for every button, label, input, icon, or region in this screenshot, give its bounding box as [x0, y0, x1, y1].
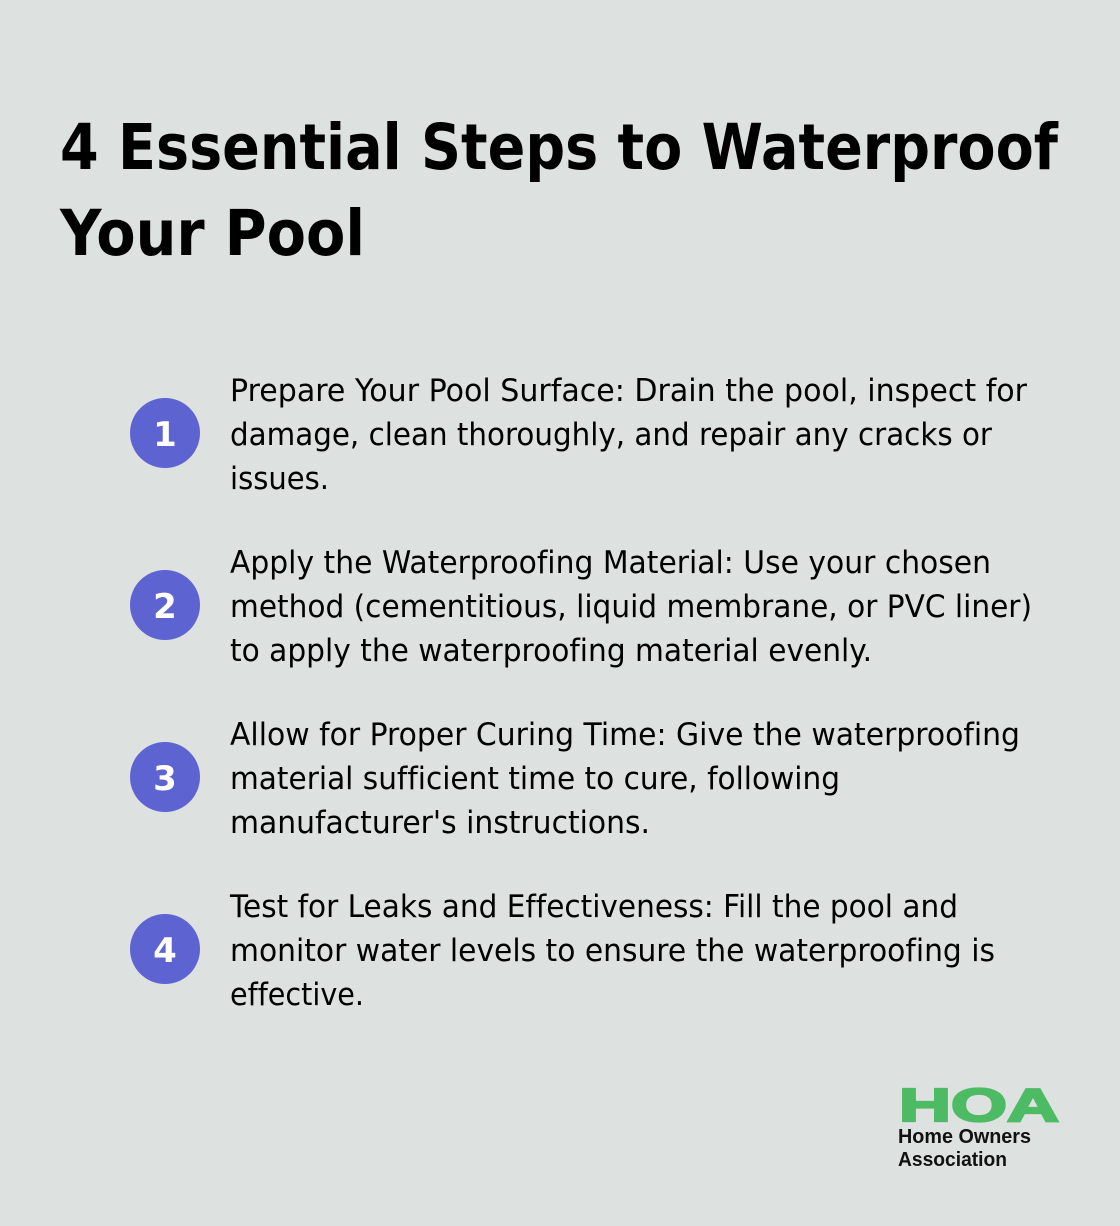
logo: HOA Home Owners Association — [898, 1079, 1059, 1171]
icon: number badge 4 — [130, 914, 200, 984]
step 2 text: to apply the waterproofing material evenly. — [230, 633, 872, 669]
icon: number badge 1 — [130, 398, 200, 468]
step 4 — [130, 889, 995, 1013]
step 2 text: method (cementitious, liquid membrane, or PVC liner) — [230, 589, 1032, 625]
icon: number badge 1: 1 — [153, 415, 177, 455]
step 3 — [130, 717, 1020, 841]
step 3 text: manufacturer's instructions. — [230, 805, 650, 841]
title — [59, 111, 1059, 270]
step 1 text: issues. — [230, 461, 329, 497]
step 1 text: Prepare Your Pool Surface: Drain the pool, inspect for — [230, 373, 1027, 409]
step 1 text — [230, 373, 1027, 497]
step 4 text: effective. — [230, 977, 364, 1013]
step 4 text: Test for Leaks and Effectiveness: Fill the pool and — [229, 889, 958, 925]
step 2 text — [230, 545, 1032, 669]
step 1 text: damage, clean thoroughly, and repair any cracks or — [230, 417, 992, 453]
logo: HOA Home Owners Association: Association — [898, 1149, 1007, 1171]
step 2 — [130, 545, 1032, 669]
step 1 — [130, 373, 1027, 497]
title: Your Pool — [59, 197, 365, 270]
step 4 text: monitor water levels to ensure the waterproofing is — [230, 933, 995, 969]
step 3 text — [230, 717, 1020, 841]
logo: HOA Home Owners Association: HOA — [899, 1079, 1059, 1131]
icon: number badge 3 — [130, 742, 200, 812]
step 2 text: Apply the Waterproofing Material: Use your chosen — [230, 545, 991, 581]
logo: HOA Home Owners Association: Home Owners — [898, 1126, 1031, 1148]
icon: number badge 4: 4 — [153, 931, 177, 971]
step 3 text: Allow for Proper Curing Time: Give the waterproofing — [230, 717, 1020, 753]
step 4 text — [229, 889, 995, 1013]
step 3 text: material sufficient time to cure, following — [230, 761, 840, 797]
icon: number badge 2 — [130, 570, 200, 640]
icon: number badge 2: 2 — [153, 587, 177, 627]
icon: number badge 3: 3 — [153, 759, 177, 799]
